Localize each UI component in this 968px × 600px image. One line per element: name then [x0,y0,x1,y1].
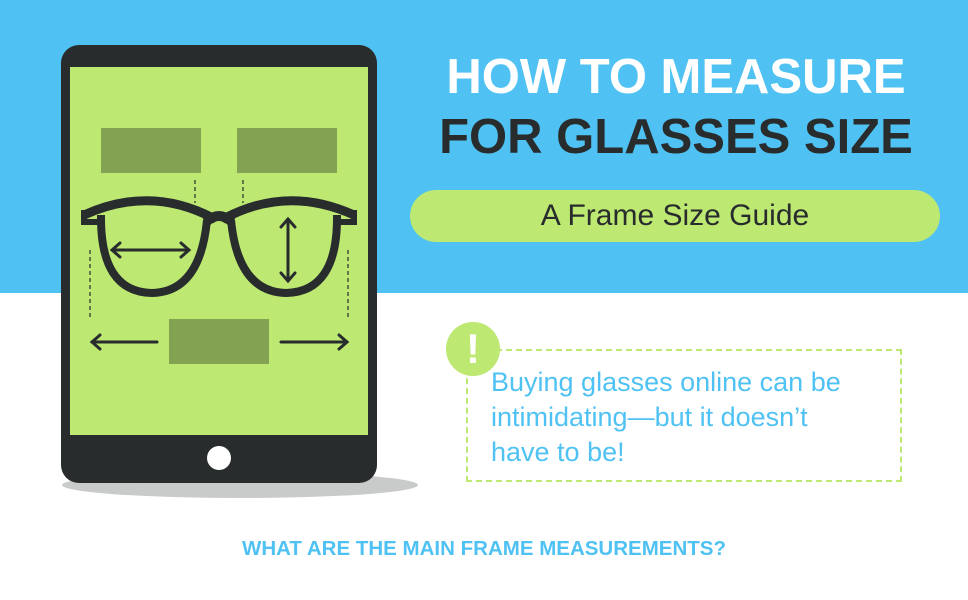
subtitle pill: A Frame Size Guide [541,199,809,232]
icon: exclamation [446,322,500,376]
callout box: Buying glasses online can be intimidating—but it doesn’t have to be! [491,367,841,467]
label placeholders [101,128,201,173]
title: FOR GLASSES SIZE [439,110,913,164]
glasses [84,201,354,293]
icon: exclamation: ! [466,325,480,372]
title [439,50,913,164]
callout box [466,349,902,482]
section heading: WHAT ARE THE MAIN FRAME MEASUREMENTS? [242,537,726,560]
subtitle pill [410,190,940,242]
title: HOW TO MEASURE [446,50,906,104]
blue header band [0,0,968,293]
